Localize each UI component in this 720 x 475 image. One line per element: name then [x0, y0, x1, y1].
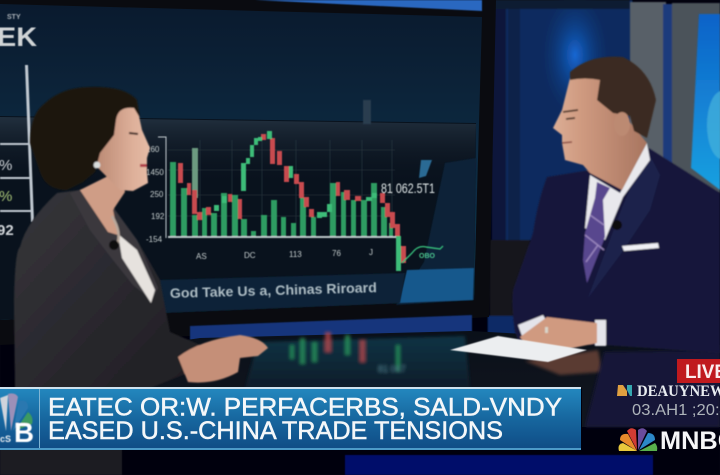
blouse	[118, 234, 155, 303]
left stat panel on wall screen	[0, 65, 34, 239]
hair	[570, 57, 656, 138]
face	[95, 107, 150, 191]
banner network logo: B	[14, 417, 34, 448]
lapel shading	[588, 150, 660, 298]
y axis labels: 1450	[146, 168, 164, 177]
trend label: OBO	[419, 253, 436, 260]
volume bars	[170, 148, 393, 237]
x axis labels: DC	[244, 251, 256, 260]
y axis labels: 250	[150, 190, 164, 199]
banner network logo: cS	[0, 434, 11, 444]
chart axis bracket	[158, 137, 166, 238]
lapel	[70, 188, 158, 300]
stock chart on wall screen	[146, 131, 443, 271]
sky streak	[419, 160, 432, 178]
blue desk edge strip	[190, 315, 472, 340]
news desk	[120, 331, 720, 427]
man anchor	[512, 57, 720, 353]
eye	[129, 133, 138, 134]
banner headline: EATEC OR:W. PERFACERBS, SALD-VNDY	[48, 394, 562, 422]
hands	[520, 317, 597, 350]
right wall screen with globe	[691, 14, 720, 190]
wall screen caption: God Take Us a, Chinas Riroard	[170, 279, 377, 301]
wall monitor screen	[0, 4, 482, 320]
rebound trend line	[402, 246, 443, 263]
banner headline	[48, 394, 562, 445]
red candles	[178, 134, 406, 263]
neck and face	[553, 78, 647, 190]
x axis labels	[196, 248, 373, 261]
x axis labels: 76	[332, 249, 341, 258]
y axis labels: -154	[146, 235, 163, 244]
neck	[80, 170, 125, 235]
y axis labels: 160	[146, 145, 160, 154]
ticker icon	[617, 385, 632, 396]
woman anchor	[14, 87, 268, 388]
lapel microphone	[612, 220, 622, 230]
banner headline: EASED U.S.-CHINA TRADE TENSIONS	[48, 417, 503, 445]
tie stripes	[585, 215, 604, 262]
news ticker brand	[617, 383, 720, 400]
green candles	[214, 131, 401, 271]
tie	[583, 182, 610, 283]
desk chart reflection: 81 067	[378, 364, 406, 374]
y axis labels	[146, 145, 165, 244]
banner network logo	[0, 393, 34, 448]
chart grid	[168, 140, 395, 237]
MNBC peacock logo	[618, 428, 657, 451]
brow and eye	[563, 110, 578, 119]
lapel microphone	[109, 240, 119, 250]
ring	[545, 327, 548, 333]
desk chart reflection	[245, 332, 470, 388]
lips	[140, 164, 147, 167]
top blue light strip	[255, 0, 482, 11]
necklace	[112, 216, 119, 245]
gray studio column	[630, 2, 720, 193]
y axis labels: 192	[151, 212, 165, 221]
earring	[94, 162, 100, 168]
woman blazer below the banner	[0, 448, 122, 475]
station logo on wall screen: STY	[7, 14, 21, 21]
shirt collar	[585, 143, 650, 240]
x axis labels: J	[369, 248, 373, 257]
hands	[178, 335, 268, 383]
price readout: 81 062.5T1	[381, 180, 435, 196]
ear	[614, 112, 630, 136]
x axis labels: AS	[196, 252, 207, 261]
lower floor blue band	[345, 455, 653, 475]
suit	[512, 147, 720, 353]
blazer	[14, 190, 200, 388]
chart baseline	[168, 236, 396, 238]
lower third banner	[0, 387, 581, 450]
hair	[30, 87, 140, 190]
pocket square	[622, 243, 659, 251]
x axis labels: 113	[289, 250, 302, 259]
wall monitor frame	[0, 0, 496, 345]
lips	[562, 142, 572, 143]
desk reflection of anchor	[525, 350, 603, 375]
paper on desk	[450, 336, 587, 362]
cuffs	[518, 315, 546, 336]
